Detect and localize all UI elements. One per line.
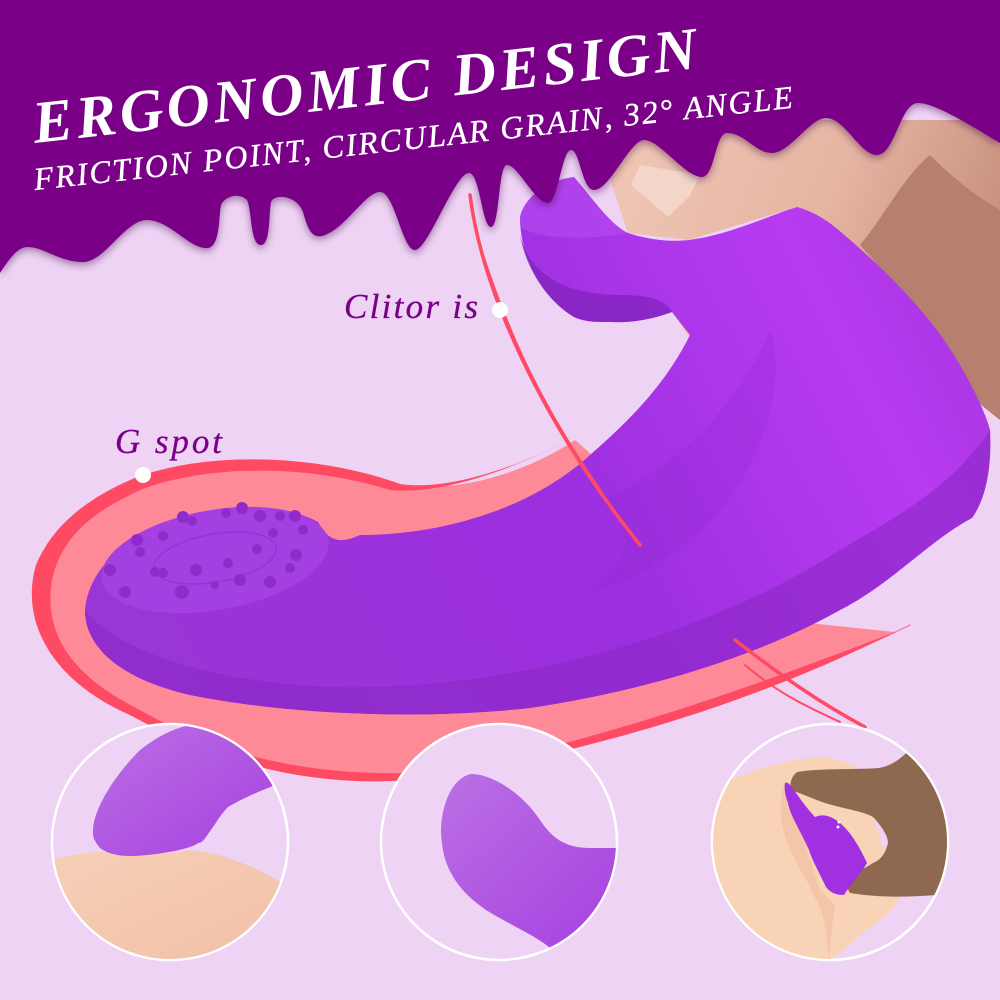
circle detail: tip contact [40, 722, 290, 970]
label: clitoral point: Clitor is [344, 287, 478, 326]
title: ERGONOMIC DESIGN [28, 15, 703, 156]
hand holding product [590, 120, 1000, 420]
circle detail: hand demonstration [700, 724, 960, 960]
textured head with nodules [93, 491, 337, 629]
red swoosh behind product [32, 440, 895, 781]
product body [85, 177, 990, 714]
marker dot [135, 467, 151, 483]
marker dot [492, 302, 508, 318]
subtitle: FRICTION POINT, CIRCULAR GRAIN, 32° ANGLE [31, 79, 795, 197]
red accent lines [470, 195, 910, 727]
label: g spot: G spot [115, 422, 223, 461]
top drip banner [0, 0, 1000, 273]
circle detail: product side [381, 724, 625, 960]
